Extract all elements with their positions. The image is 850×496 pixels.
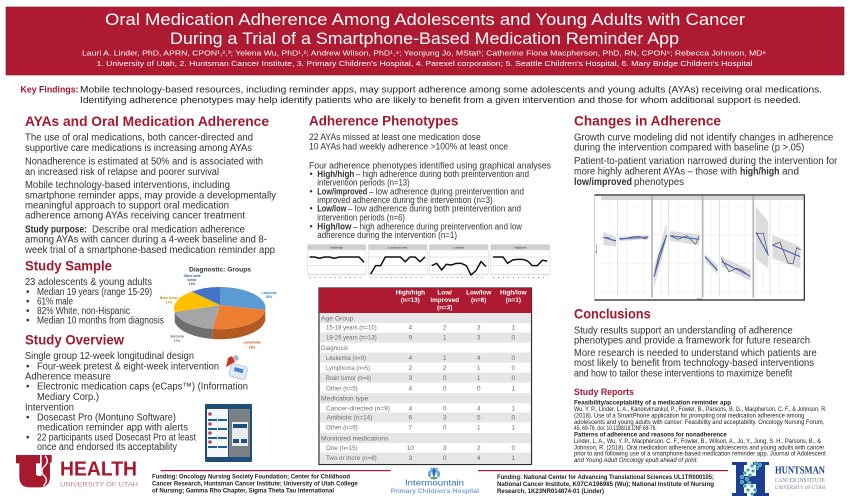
table rows: 4	[477, 405, 481, 412]
overview text: Single group 12-week longitudinal design	[25, 351, 194, 362]
logo: University of Utah Health	[16, 455, 138, 489]
changes text: phenotypes	[634, 177, 684, 188]
table header: improved	[430, 297, 459, 304]
pie chart: diagnostic groups: Leukemia	[262, 291, 277, 295]
study purpose: among AYAs with cancer during a 4-week baseline and 8-	[25, 235, 267, 246]
table rows: 6	[408, 415, 412, 422]
pie chart: diagnostic groups: 17%	[166, 300, 172, 304]
icon: medication caps	[226, 355, 248, 380]
table header: (n=1)	[506, 297, 521, 304]
table header: Low/low	[466, 290, 491, 296]
pie chart: diagnostic groups: Brain tumor	[160, 296, 179, 300]
table rows: 2	[443, 325, 447, 332]
chart: growth curve panels: Week	[697, 299, 702, 301]
body text: Mobile technology-based interventions, including	[25, 180, 230, 191]
sample text: 61% male	[37, 297, 73, 308]
body text: The use of oral medications, both cancer-directed and	[25, 132, 253, 144]
logo: Huntsman Cancer Institute: CANCER INSTITUTE	[775, 477, 825, 484]
table rows: 19-29 years (n=13)	[326, 335, 377, 342]
changes text: and	[782, 166, 799, 177]
table rows: Brain tumor (n=4)	[326, 375, 371, 382]
title	[105, 11, 746, 48]
logo: Huntsman Cancer Institute: HUNTSMAN	[775, 465, 826, 476]
table rows: 0	[511, 335, 515, 342]
table rows: 3	[408, 455, 412, 462]
overview text: •	[26, 413, 30, 424]
sample text: •	[26, 297, 30, 308]
changes text: Patient-to-patient variation narrowed during the intervention for	[574, 156, 838, 167]
table header: High/high	[396, 290, 425, 296]
chart: four phenotype small multiples: Low/improved	[388, 245, 407, 249]
table rows: Medication type	[321, 396, 369, 403]
overview text: Adherence measure	[25, 372, 111, 383]
phenotype list: Low/low	[317, 204, 347, 214]
references: Johnson, R. (2018). Oral medication adherence among adolescents and young adults with cancer	[574, 444, 824, 451]
table rows: 0	[443, 455, 447, 462]
table: demographics by phenotype	[319, 288, 532, 464]
table header: (n=6)	[471, 297, 486, 304]
study purpose: week trial of a smartphone-based medication reminder app	[24, 245, 275, 256]
panel: study reports	[574, 387, 827, 464]
phenotype list: High/high	[317, 169, 354, 179]
chart: four phenotype small multiples: High/high	[330, 245, 343, 249]
references	[574, 399, 827, 464]
phenotype list: improved adherence during the intervention (n=3)	[317, 195, 493, 205]
table rows: 4	[408, 355, 412, 362]
sample text: •	[26, 287, 30, 298]
table rows: 1	[511, 405, 515, 412]
references: (2018). Use of a SmartPhone application for prompting oral medication adherence among	[574, 413, 805, 420]
pie chart: diagnostic groups: Sarcoma	[170, 334, 184, 338]
funding right: Research, 1K23NR014874-01 (Linder)	[497, 488, 604, 495]
table rows: Cancer-directed (n=9)	[326, 405, 390, 412]
table rows: 4	[477, 355, 481, 362]
funding left: of Nursing; Gamma Rho Chapter, Sigma Theta Tau International	[152, 488, 334, 495]
phenotype list	[310, 169, 529, 240]
table rows: 4	[477, 455, 481, 462]
body text: adherence among AYAs receiving cancer treatment	[25, 211, 245, 222]
phenotype list: •	[310, 169, 313, 179]
affiliations: 1. University of Utah, 2. Huntsman Cancer Institute, 3. Primary Children's Hospital, 4. Parexel corporation; 5. Seattle Children's Hospital, 6. Mary Bridge Children's Hospital	[96, 61, 753, 68]
authors: Lauri A. Linder, PhD, APRN, CPON¹,²,³; Yelena Wu, PhD¹,²; Andrew Wilson, PhD¹,⁴; Yeonjung Jo, MStat¹; Catherine Fiona Macpherson, PhD, RN, CPON⁵; Rebecca Johnson, MD⁶	[82, 50, 766, 58]
overview text: •	[26, 382, 30, 393]
references: prior to and following use of a smartphone-based medication reminder app. Journal of Adolescent	[574, 451, 826, 458]
heading: Study Overview	[25, 332, 124, 347]
funding right: National Cancer Institute, K07CA196985 (Wu); National Institute of Nursing	[497, 481, 714, 488]
table rows: 3	[408, 375, 412, 382]
overview text: 22 participants used Dosecast Pro at least	[37, 432, 196, 443]
conclusions text: phenotypes and provide a framework for future research	[574, 335, 810, 346]
chart: growth curve panels: Adherence	[595, 243, 598, 253]
table rows: Antibiotic (n=14)	[326, 415, 372, 422]
table rows: Other (n=9)	[326, 425, 358, 432]
references: and Young Adult Oncology epub ahead of print.	[574, 457, 698, 464]
overview text: medication reminder app with alerts	[37, 423, 188, 434]
image: app screenshot	[205, 404, 252, 462]
table rows: 1	[443, 355, 447, 362]
changes text: during the intervention compared with baseline (p >.05)	[574, 142, 804, 153]
panel: conclusions	[574, 306, 817, 380]
table rows: 0	[443, 375, 447, 382]
pie chart: diagnostic groups: 17%	[174, 339, 180, 343]
table rows: 2	[443, 365, 447, 372]
chart: four phenotype small multiples	[307, 244, 550, 278]
overview text: Four-week pretest & eight-week intervention	[37, 361, 219, 372]
funding left: Funding: Oncology Nursing Society Foundation; Center for Childhood	[152, 474, 350, 481]
pie chart: diagnostic groups: Other solid	[184, 274, 200, 278]
key findings	[20, 84, 822, 106]
table rows: 0	[477, 385, 481, 392]
logo: Intermountain Primary Children's Hospital	[391, 467, 479, 495]
body text: meaningful approach to support oral medication	[25, 200, 229, 212]
sample text: •	[26, 306, 30, 317]
table header: High/low	[500, 290, 527, 296]
sample text: •	[26, 315, 30, 326]
heading: Study Sample	[25, 259, 112, 274]
phenotype summary: Four adherence phenotypes identified using graphical analyses	[309, 160, 551, 170]
table rows: 1	[477, 365, 481, 372]
body text: smartphone reminder apps, may provide a developmentally	[25, 190, 276, 201]
phenotype list: Low/improved	[317, 186, 367, 196]
pie chart: diagnostic groups: tumor	[187, 278, 197, 282]
sample text: Median 19 years (range 15-29)	[37, 287, 152, 298]
references: adolescents and young adults with cancer: Feasibility and acceptability. Oncology Nursing Forum,	[574, 419, 825, 426]
table rows: 0	[511, 415, 515, 422]
overview text: Intervention	[25, 402, 74, 413]
heading: Study Reports	[574, 387, 634, 398]
table rows: 4	[408, 325, 412, 332]
heading: AYAs and Oral Medication Adherence	[25, 114, 269, 129]
title: During a Trial of a Smartphone-Based Medication Reminder App	[170, 30, 679, 48]
panel: AYAs and oral medication adherence	[24, 114, 276, 256]
table rows: 1	[477, 425, 481, 432]
chart: growth curve panels	[594, 195, 804, 301]
pie chart: diagnostic groups	[160, 266, 277, 350]
heading: Changes in Adherence	[574, 114, 721, 129]
study purpose	[24, 224, 275, 256]
table rows: Age Group	[321, 315, 354, 322]
changes text: more highly adherent AYAs – those with	[574, 166, 737, 177]
table header: Low/	[437, 290, 452, 296]
sample text	[25, 277, 164, 326]
table rows: 3	[443, 445, 447, 452]
table rows: 1	[477, 375, 481, 382]
table header: (n=3)	[437, 304, 452, 312]
table rows: 5	[477, 415, 481, 422]
table rows: Other (n=5)	[326, 385, 358, 392]
body text: an increased risk of relapse and poorer survival	[25, 167, 219, 178]
table rows: 0	[443, 405, 447, 412]
table rows: 0	[443, 385, 447, 392]
table rows: 3	[477, 325, 481, 332]
table rows: One (n=15)	[326, 445, 358, 452]
table header: (n=13)	[401, 297, 420, 304]
changes text: low/improved	[574, 177, 632, 188]
funding right: Funding: National Center for Advancing Translational Sciences UL1TR000105;	[497, 474, 714, 481]
changes text: Growth curve modeling did not identify changes in adherence	[574, 132, 834, 143]
phenotype list: •	[310, 186, 313, 196]
table rows: 0	[511, 445, 515, 452]
phenotype list: adherence during the intervention (n=1)	[317, 230, 457, 240]
phenotype list: intervention periods (n=13)	[317, 178, 410, 188]
pie chart: diagnostic groups: Lymphoma	[244, 340, 261, 344]
overview text: •	[26, 361, 30, 372]
phenotype list: – high adherence during preintervention and low	[353, 221, 522, 231]
phenotype summary	[309, 132, 551, 170]
logo: Intermountain Primary Children's Hospital: Intermountain	[405, 479, 464, 488]
table rows: 2	[477, 445, 481, 452]
logo: University of Utah Health: HEALTH	[60, 459, 137, 481]
body text	[25, 132, 276, 222]
logo: Huntsman Cancer Institute	[732, 461, 826, 496]
study purpose: Describe oral medication adherence	[92, 224, 245, 235]
table rows: Monitored medications	[321, 435, 389, 442]
phenotype list: intervention periods (n=6)	[317, 213, 405, 223]
funding left: Cancer Research, Huntsman Cancer Institute; University of Utah College	[152, 481, 358, 488]
table rows: 0	[443, 425, 447, 432]
table rows: 1	[443, 335, 447, 342]
table rows: 0	[511, 375, 515, 382]
pie chart: diagnostic groups: Diagnostic: Groups	[189, 266, 251, 274]
overview text	[25, 351, 248, 453]
phenotype list: – high adherence during both preintervention and	[356, 169, 529, 179]
logo: Intermountain Primary Children's Hospital: Primary Children's Hospital	[391, 488, 479, 495]
table rows: 0	[511, 355, 515, 362]
table rows: 9	[408, 335, 412, 342]
table rows: 1	[511, 455, 515, 462]
conclusions text	[574, 325, 817, 380]
overview text: Mediary Corp.)	[37, 392, 99, 403]
phenotype summary: 22 AYAs missed at least one medication dose	[309, 132, 481, 142]
phenotype list: – low adherence during preintervention and	[369, 186, 524, 196]
overview text: once and endorsed its acceptability	[37, 442, 177, 453]
conclusions text: most likely to benefit from technology-based interventions	[574, 358, 814, 369]
panel: adherence phenotypes	[309, 114, 551, 240]
title: Oral Medication Adherence Among Adolescents and Young Adults with Cancer	[105, 11, 746, 29]
key findings: Key Findings:	[20, 84, 78, 96]
sample text: 82% White, non-Hispanic	[37, 306, 130, 317]
logo: University of Utah Health: UNIVERSITY OF UTAH	[60, 482, 138, 489]
table rows: 1	[511, 385, 515, 392]
table rows: 2	[408, 365, 412, 372]
body text: supportive care medications is increasing among AYAs	[25, 143, 252, 154]
phenotype list: – low adherence during both preintervention and	[348, 204, 521, 214]
table rows: Lymphoma (n=5)	[326, 365, 370, 372]
table rows: 4	[408, 385, 412, 392]
heading: Adherence Phenotypes	[309, 114, 458, 129]
panel: study overview	[25, 332, 248, 453]
overview text: Electronic medication caps (eCaps™) (Information	[37, 382, 248, 393]
references: Linder, L. A., Wu, Y. P., Macpherson, C. F., Fowler, B., Wilson, A., Jo, Y., Jung, S. H., Parsons, B., &	[574, 438, 822, 445]
header banner	[6, 7, 844, 75]
table rows: 10	[407, 445, 414, 452]
study purpose: Study purpose:	[25, 224, 87, 235]
conclusions text: More research is needed to understand which patients are	[574, 348, 817, 359]
chart: four phenotype small multiples: Low/low	[453, 245, 465, 249]
phenotype list: •	[310, 204, 313, 214]
panel: changes in adherence	[574, 114, 838, 188]
panel: study sample	[25, 259, 164, 326]
phenotype list: High/low	[317, 221, 352, 231]
logo: Huntsman Cancer Institute: UNIVERSITY OF UTAH	[775, 486, 826, 491]
phenotype summary: 10 AYAs had weekly adherence >100% at least once	[309, 141, 508, 151]
changes text: high/high	[740, 166, 780, 177]
key findings: Identifying adherence phenotypes may help identify patients who are likely to benefit from a given intervention and those for whom additional support is needed.	[80, 95, 801, 106]
table rows: Two or more (n=8)	[326, 455, 377, 462]
changes text	[574, 132, 838, 188]
table rows: 7	[408, 425, 412, 432]
references: 45, 69-76. doi: 10.1188/18.ONF.69-76.	[574, 425, 657, 432]
table rows: 1	[511, 325, 515, 332]
funding right	[478, 470, 728, 495]
key findings: Mobile technology-based resources, including reminder apps, may support adherence among some adolescents and young adults (AYAs) receiving oral medications.	[80, 84, 822, 96]
table rows: 0	[511, 365, 515, 372]
table rows	[320, 313, 531, 463]
table header	[319, 288, 532, 313]
conclusions text: and how to tailor these interventions to maximize benefit	[574, 369, 792, 380]
table rows: 3	[443, 415, 447, 422]
table rows: Leukemia (n=9)	[326, 355, 366, 362]
table rows: 1	[511, 425, 515, 432]
heading: Conclusions	[574, 306, 651, 321]
body text: Nonadherence is estimated at 50% and is associated with	[25, 156, 263, 168]
table rows: 15-18 years (n=10)	[326, 325, 377, 332]
phenotype list: •	[310, 221, 313, 231]
conclusions text: Study results support an understanding of adherence	[574, 325, 793, 336]
pie chart: diagnostic groups: 36%	[266, 295, 272, 299]
references: Feasibility/acceptability of a medication reminder app	[574, 399, 731, 406]
references: Patterns of adherence and reasons for nonadherence	[574, 432, 727, 439]
sample text: 23 adolescents & young adults	[25, 277, 152, 288]
table rows: Diagnosis	[321, 345, 349, 352]
table rows: 3	[477, 335, 481, 342]
funding left	[152, 470, 391, 495]
pie chart: diagnostic groups: 13%	[189, 282, 195, 286]
sample text: Median 10 months from diagnosis	[37, 315, 164, 326]
overview text: •	[26, 432, 30, 443]
chart: four phenotype small multiples: High/low	[515, 245, 527, 249]
pie chart: diagnostic groups: 18%	[249, 346, 255, 350]
overview text: Dosecast Pro (Montuno Software)	[37, 413, 176, 424]
table rows: 4	[408, 405, 412, 412]
